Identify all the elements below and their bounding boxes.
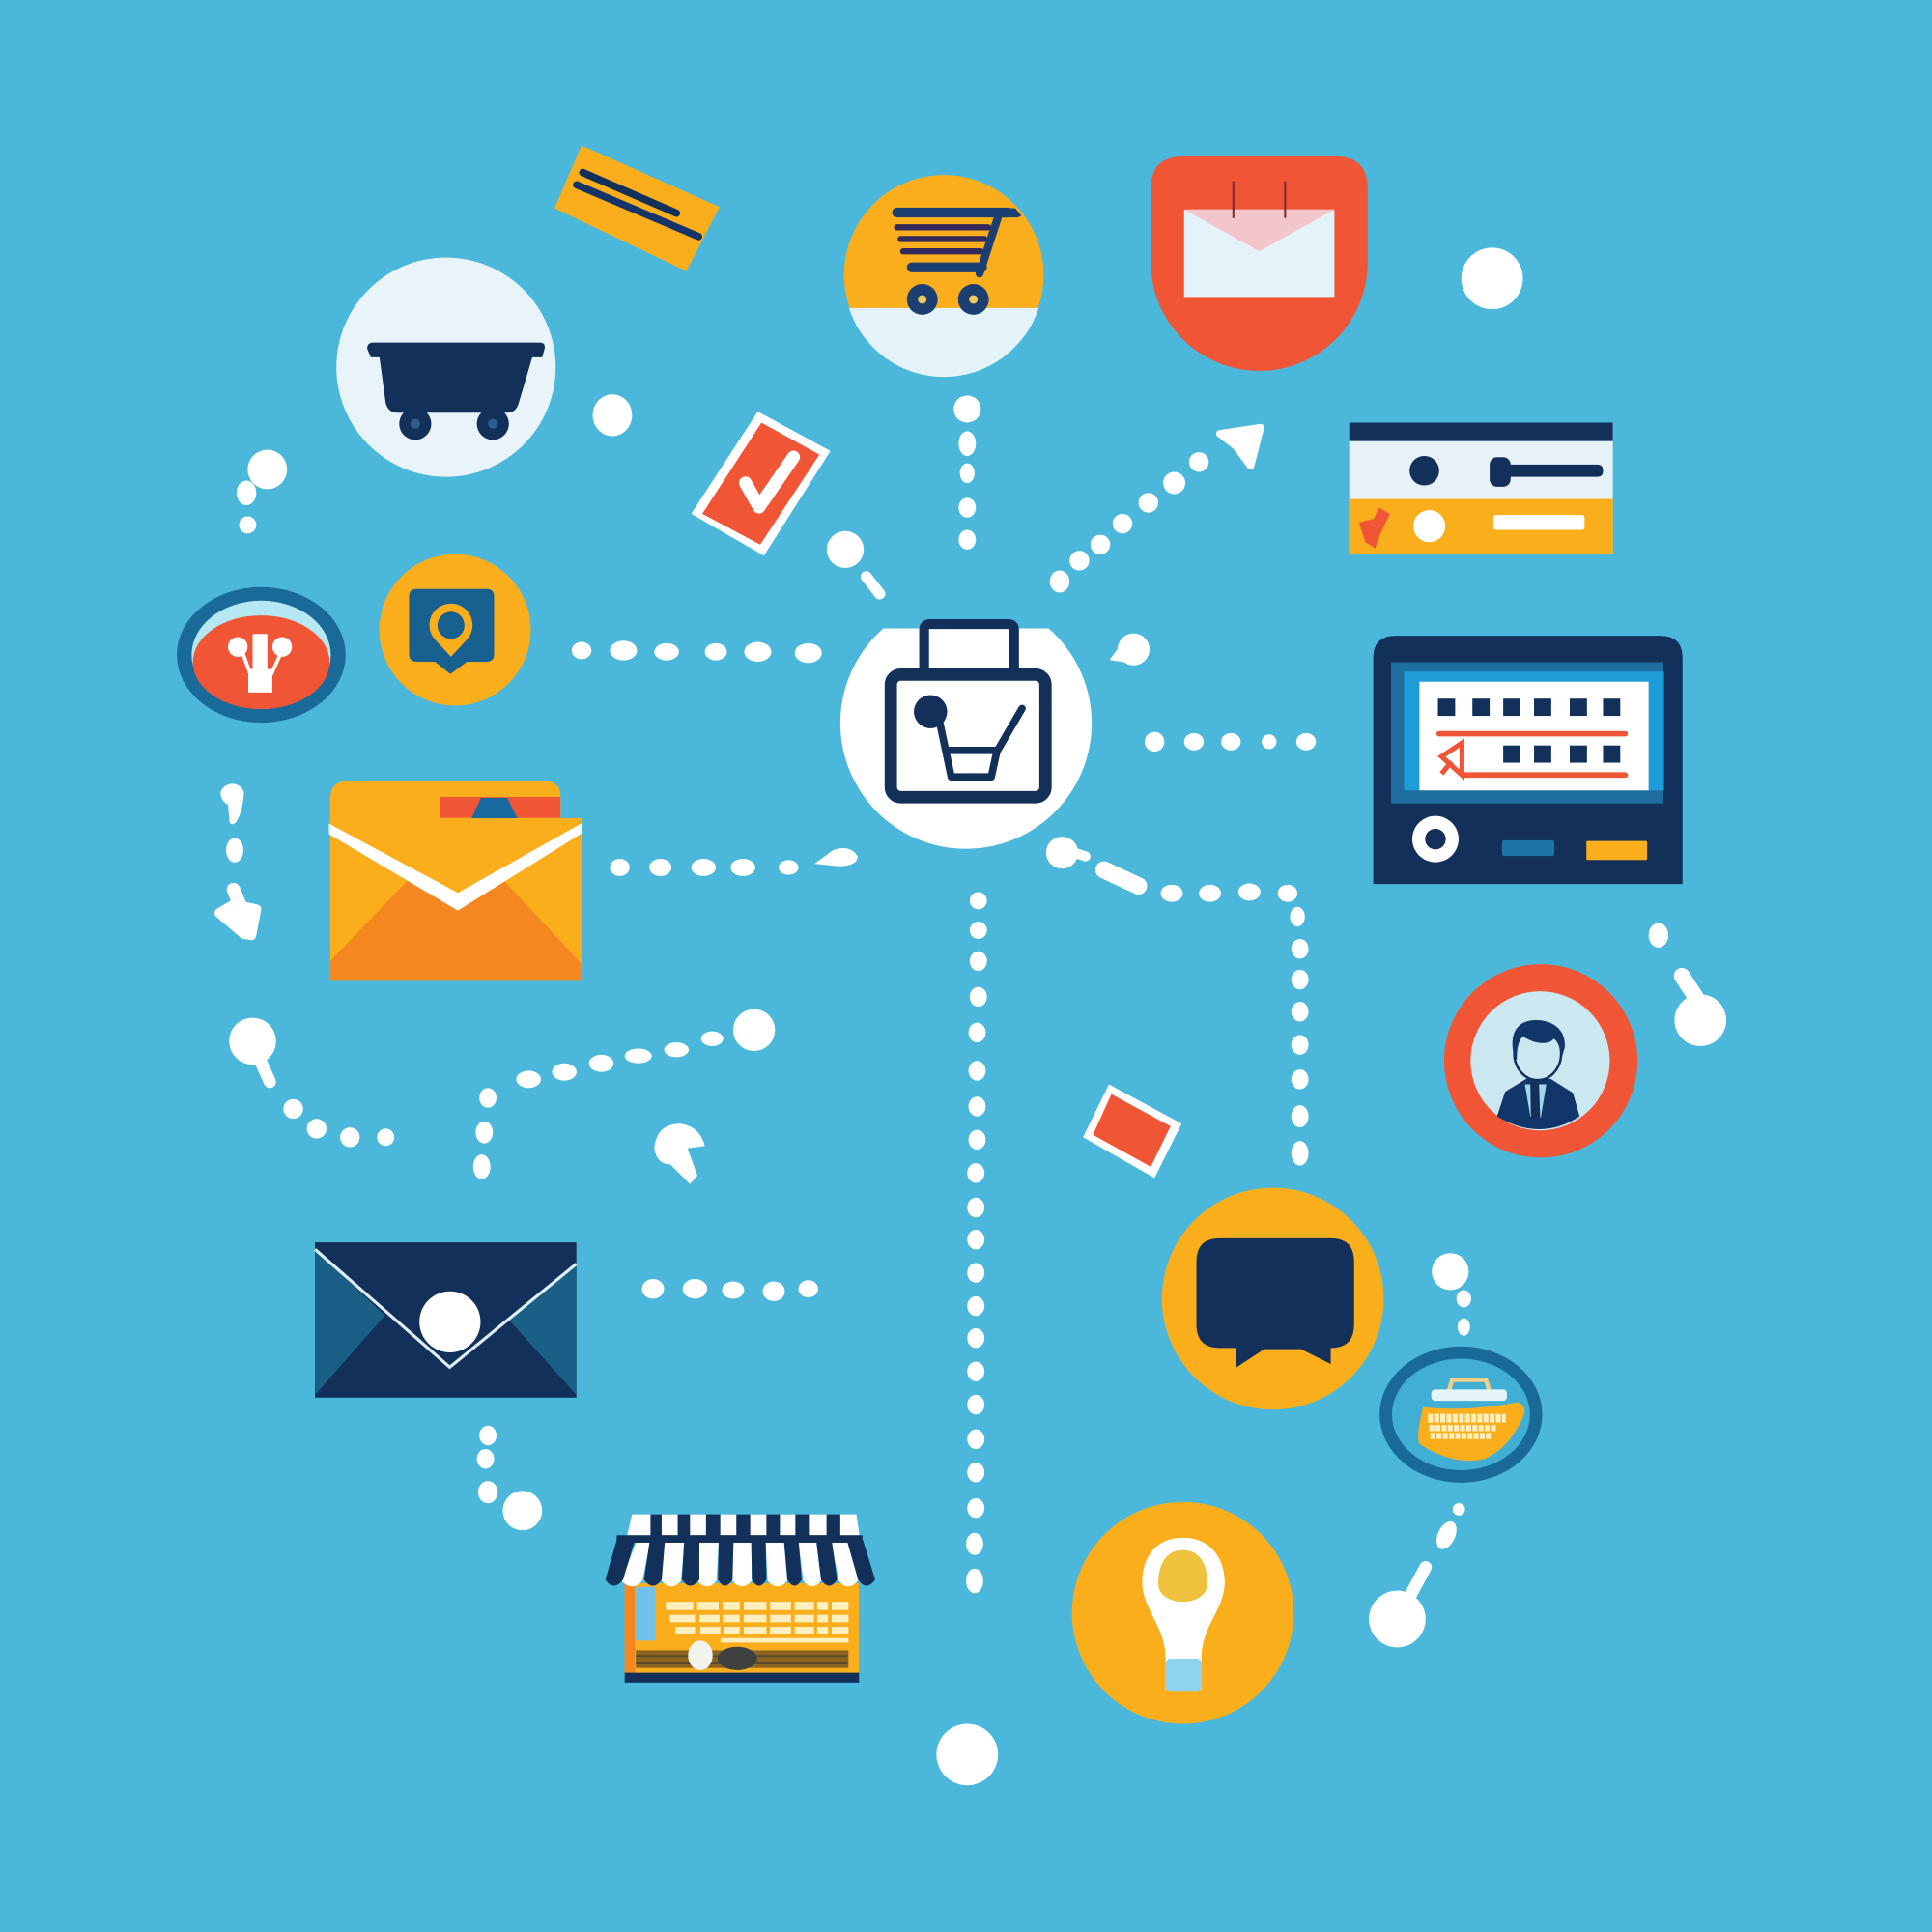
dots hub to terminal <box>1145 732 1316 752</box>
dotted path with end dot <box>473 1009 775 1179</box>
connectors: white dotted paths and dots <box>219 394 1726 1785</box>
dot bottom center <box>936 1723 998 1785</box>
link check to hub <box>827 531 880 594</box>
icon: orange envelope folder <box>329 781 582 980</box>
icon: small oval with keyboard bag <box>1386 1352 1536 1476</box>
icon: dark envelope <box>315 1242 577 1398</box>
arrow to mail <box>1050 428 1261 593</box>
small blob right of hub <box>1112 634 1150 666</box>
icon: location pin circle <box>380 554 530 705</box>
icon: storefront <box>606 1515 875 1683</box>
terminal to avatar link <box>1649 923 1726 1046</box>
awning <box>606 1515 875 1586</box>
icon: payment terminal <box>1374 636 1683 884</box>
dots dark envelope to center <box>642 1279 818 1301</box>
icon: shopping cart circle <box>844 175 1043 377</box>
left down arrow <box>219 783 256 935</box>
icon: red tilted card <box>1083 1084 1181 1178</box>
dots below dark envelope <box>477 1426 542 1530</box>
long vertical dots <box>966 892 987 1593</box>
icon: chat bubble circle <box>1162 1188 1383 1409</box>
dots hub to chat <box>1046 837 1309 1166</box>
icon: basket circle <box>336 258 555 477</box>
dots chat to small oval <box>1432 1253 1471 1336</box>
lower left dotted curve <box>229 1018 394 1148</box>
icon: checkmark card <box>692 412 831 555</box>
icon: red mail badge <box>1151 156 1368 371</box>
icon: person avatar <box>1444 964 1637 1157</box>
dot: top right <box>1462 247 1523 309</box>
icon: bank card panel <box>1350 423 1613 554</box>
icon: light bulb circle <box>1072 1502 1293 1723</box>
dots envelope to hub <box>610 848 858 876</box>
blob center left <box>654 1123 705 1184</box>
icon: yellow ticket <box>554 146 720 271</box>
dots location to hub <box>572 640 822 663</box>
dots to cart <box>953 395 980 550</box>
dots bottom right <box>1369 1503 1465 1647</box>
dot near basket <box>593 394 632 437</box>
top left arc <box>237 450 287 533</box>
icon: central shopping bag <box>840 624 1092 849</box>
icon: red oval with earbuds <box>177 587 346 723</box>
